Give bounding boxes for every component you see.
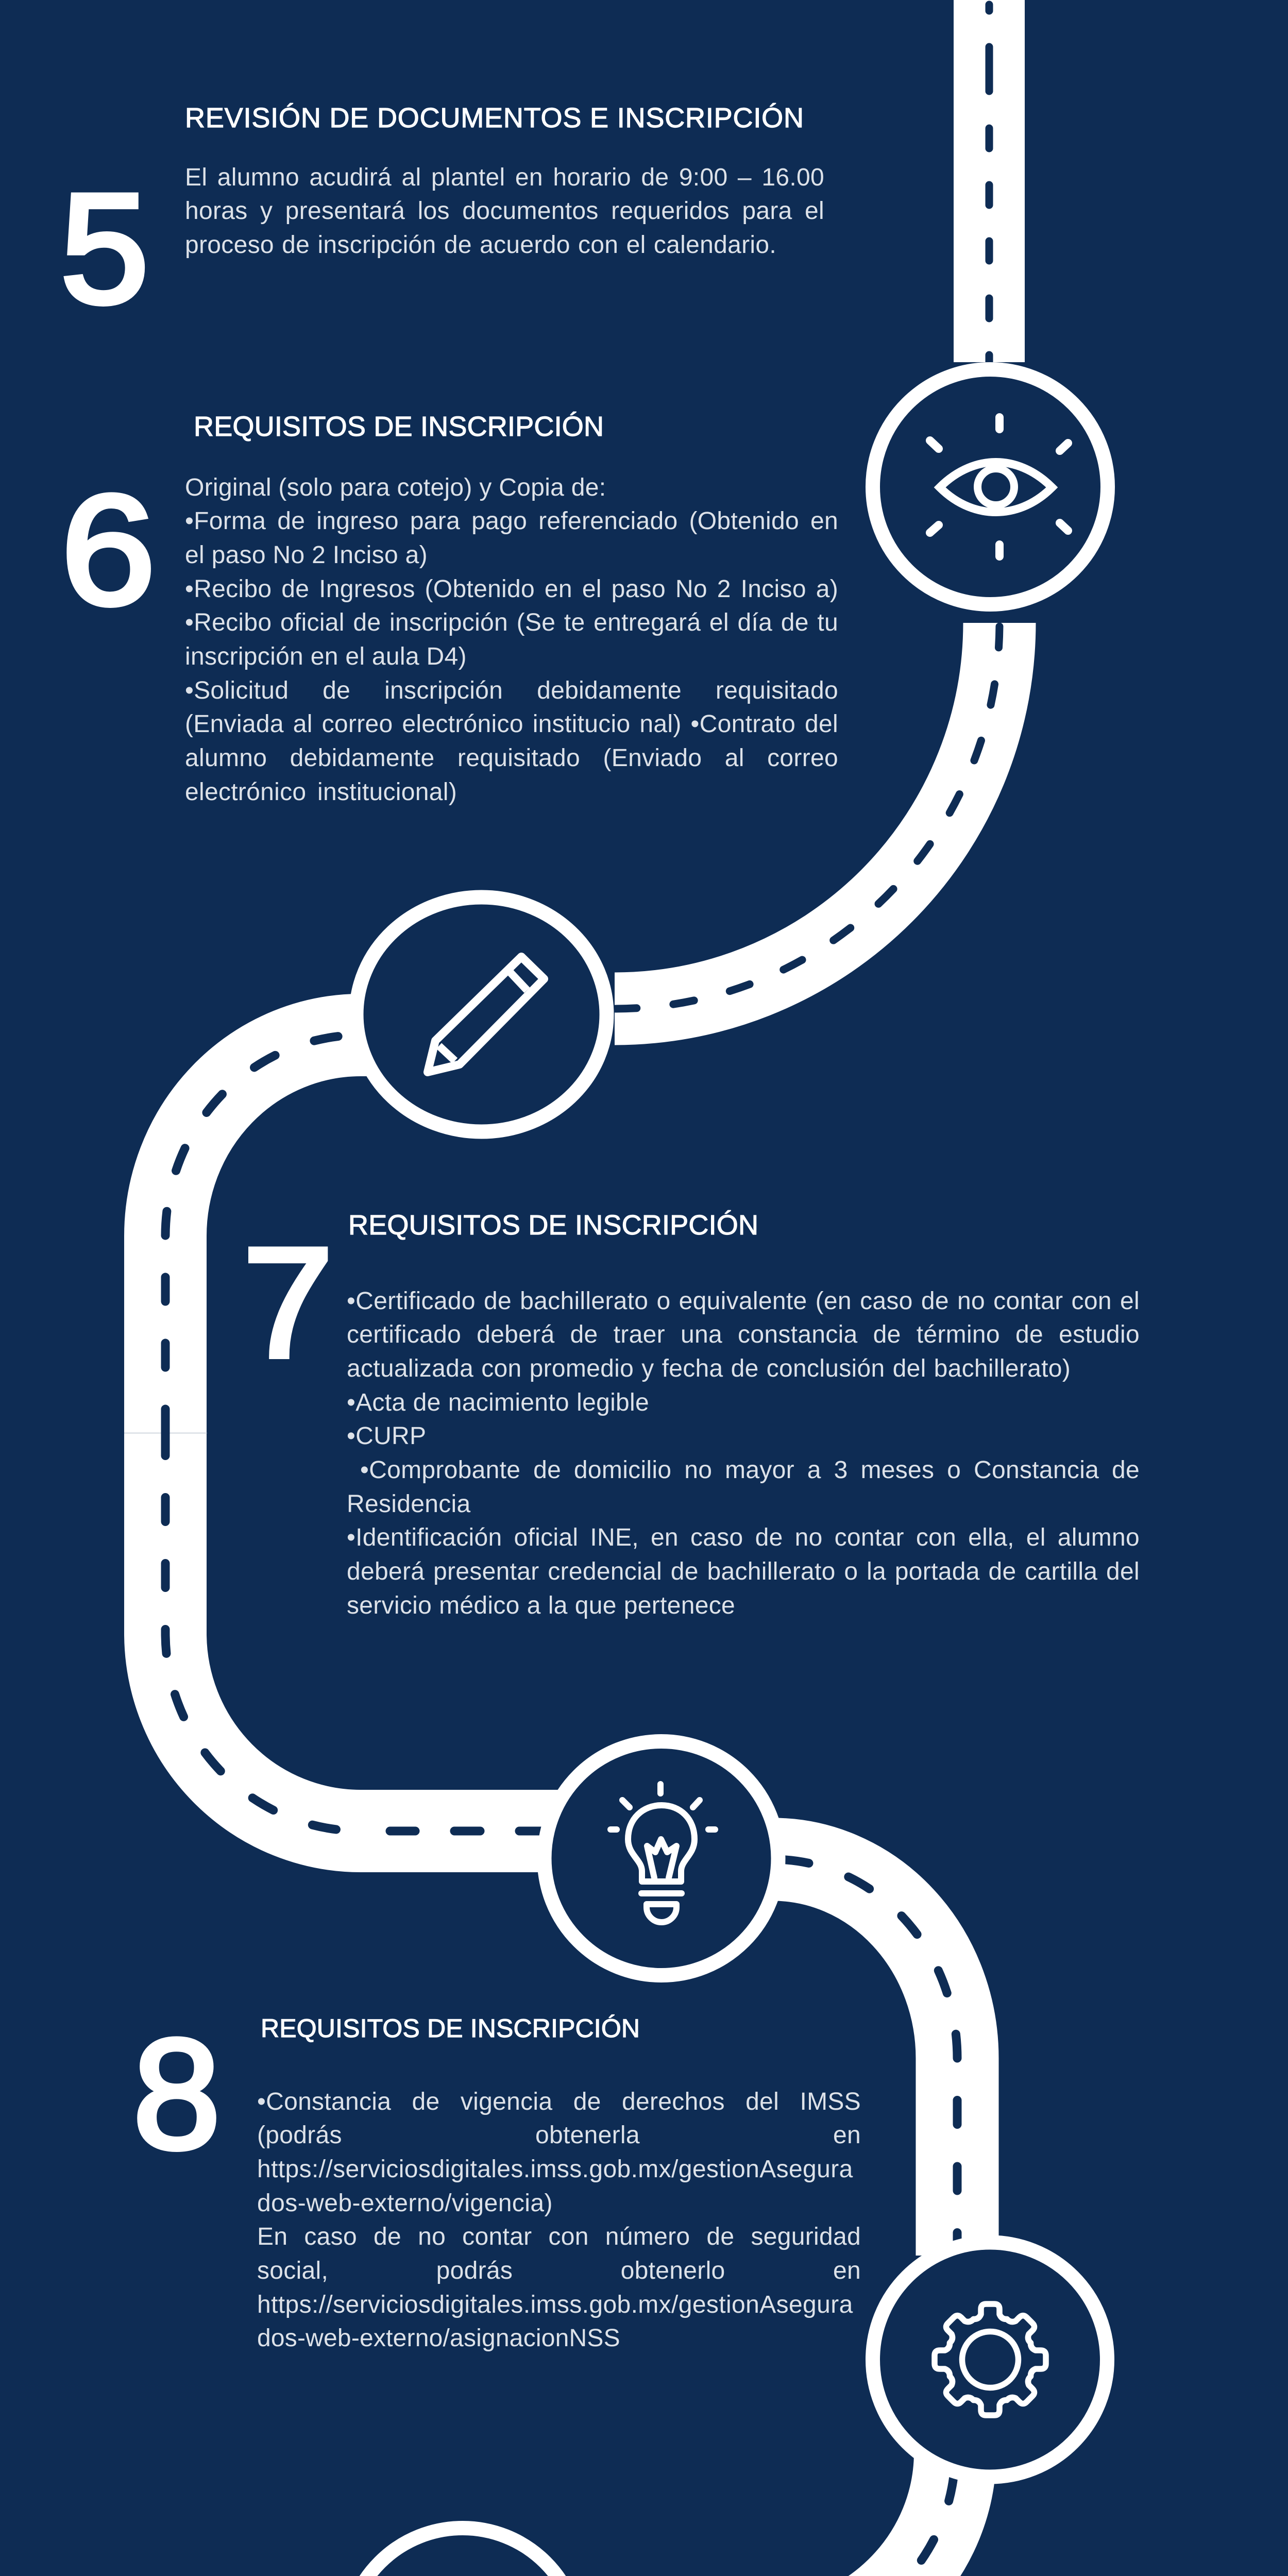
text block: step 7 requirements: •Certificado de bachillerato o equivalente (en caso de no contar con el: [347, 1287, 1140, 1315]
panel: step 6: [61, 411, 838, 806]
text block: step 7 requirements: actualizada con promedio y fecha de conclusión del bachillerato): [347, 1355, 1071, 1382]
text block: step 6 requirements: [185, 474, 838, 806]
text block: step 5 description: horas y presentará los documentos requeridos para el: [185, 197, 824, 225]
text block: step 7 requirements: •Identificación oficial INE, en caso de no contar con ella, el alumno: [347, 1524, 1140, 1551]
text block: step 5 description: proceso de inscripción de acuerdo con el calendario.: [185, 231, 776, 259]
number 8: 8: [133, 2009, 221, 2181]
number 7: 7: [243, 1216, 333, 1390]
icon: eye in circle: [873, 369, 1108, 604]
text block: step 7 requirements: certificado deberá de traer una constancia de término de estudio: [347, 1321, 1140, 1348]
text block: step 8 requirements: https://serviciosdigitales.imss.gob.mx/gestionAsegura: [257, 2156, 853, 2183]
panel: step 8: [133, 2009, 861, 2352]
text block: step 8 requirements: [257, 2088, 861, 2352]
heading: step 5: REVISIÓN DE DOCUMENTOS E INSCRIPCIÓN: [185, 103, 804, 133]
text block: step 6 requirements: •Recibo de Ingresos (Obtenido en el paso No 2 Inciso a): [185, 575, 838, 603]
text block: step 6 requirements: (Enviada al correo electrónico institucio nal) •Contrato del: [185, 710, 838, 738]
text block: step 6 requirements: inscripción en el aula D4): [185, 643, 467, 670]
icon: lightbulb in circle: [544, 1741, 778, 1975]
road segment: right bend from lightbulb to gear: [773, 1859, 957, 2256]
icon: pencil in circle: [357, 897, 607, 1131]
text block: step 6 requirements: el paso No 2 Inciso a): [185, 541, 428, 569]
text block: step 8 requirements: (podrás obtenerla en: [257, 2122, 861, 2149]
panel: step 5: [60, 103, 824, 314]
text block: step 7 requirements: deberá presentar credencial de bachillerato o la portada de cartilla del: [347, 1558, 1140, 1585]
icon: gear in circle: [873, 2242, 1107, 2477]
text block: step 8 requirements: En caso de no contar con número de seguridad: [257, 2223, 861, 2250]
text block: step 6 requirements: electrónico institucional): [185, 778, 457, 806]
text block: step 5 description: El alumno acudirá al plantel en horario de 9:00 – 16.00: [185, 164, 824, 191]
text block: step 7 requirements: servicio médico a la que pertenece: [347, 1592, 735, 1619]
heading: step 7: REQUISITOS DE INSCRIPCIÓN: [348, 1210, 758, 1241]
text block: step 5 description: [185, 164, 824, 259]
text block: step 7 requirements: [347, 1287, 1140, 1619]
text block: step 6 requirements: •Solicitud de inscripción debidamente requisitado: [185, 677, 838, 704]
text block: step 6 requirements: •Recibo oficial de inscripción (Se te entregará el día de tu: [185, 609, 838, 636]
heading: step 6: REQUISITOS DE INSCRIPCIÓN: [194, 411, 604, 442]
number 6: 6: [61, 463, 156, 637]
heading: step 8: REQUISITOS DE INSCRIPCIÓN: [261, 2014, 640, 2043]
text block: step 7 requirements: •CURP: [347, 1422, 426, 1450]
text block: step 8 requirements: social, podrás obtenerlo en: [257, 2257, 861, 2284]
road segment: curve from eye to pencil: [615, 623, 999, 1009]
text block: step 7 requirements: Residencia: [347, 1490, 470, 1518]
text block: step 6 requirements: •Forma de ingreso para pago referenciado (Obtenido en: [185, 507, 838, 535]
text block: step 8 requirements: https://serviciosdigitales.imss.gob.mx/gestionAsegura: [257, 2291, 853, 2318]
text block: step 7 requirements: •Comprobante de domicilio no mayor a 3 meses o Constancia de: [360, 1456, 1140, 1484]
text block: step 6 requirements: alumno debidamente requisitado (Enviado al correo: [185, 744, 838, 772]
text block: step 8 requirements: dos-web-externo/vigencia): [257, 2190, 553, 2217]
road segment: curve from gear to checkmark: [567, 2452, 955, 2576]
text block: step 6 requirements: Original (solo para cotejo) y Copia de:: [185, 474, 606, 501]
text block: step 8 requirements: •Constancia de vigencia de derechos del IMSS: [257, 2088, 861, 2115]
icon: checkmark in circle: [346, 2528, 580, 2576]
road segment: left bend from pencil to lightbulb: [124, 1035, 567, 1831]
text block: step 7 requirements: •Acta de nacimiento legible: [347, 1389, 649, 1416]
text block: step 8 requirements: dos-web-externo/asignacionNSS: [257, 2325, 620, 2352]
road segment: top straight: [954, 0, 1025, 371]
panel: step 7: [243, 1210, 1140, 1619]
